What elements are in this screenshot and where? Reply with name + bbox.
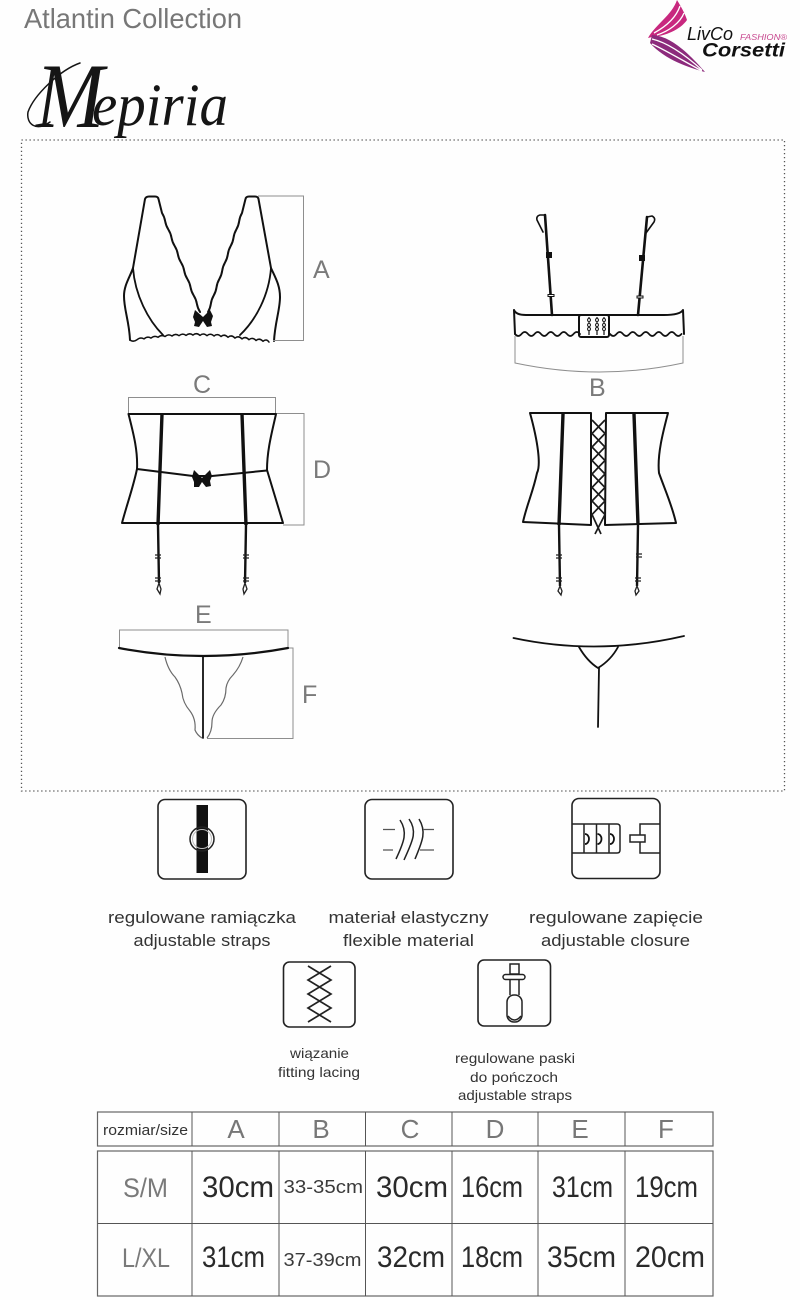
label C: C — [193, 371, 211, 399]
label: flexible material — [328, 908, 489, 950]
row L/XL — [122, 1241, 705, 1274]
garter lower straps — [158, 525, 246, 583]
product name — [28, 45, 228, 147]
diagram: corset back — [523, 413, 676, 595]
diagram: bra front — [124, 196, 330, 342]
bra outline — [124, 196, 280, 341]
garter clips — [556, 554, 642, 595]
waist band — [137, 469, 267, 476]
strap sliders — [546, 252, 645, 261]
label F: F — [302, 681, 317, 709]
label A: A — [313, 256, 330, 284]
label: adjustable stocking straps: adjustable straps — [458, 1087, 572, 1103]
waistband — [514, 636, 684, 647]
row L/XL: 35cm — [547, 1241, 616, 1274]
strap rings — [548, 294, 643, 298]
dotted frame — [22, 140, 784, 791]
label: fitting lacing — [278, 1045, 360, 1080]
row L/XL: 31cm — [202, 1241, 265, 1274]
diagram: bra back — [514, 215, 684, 402]
garter straps — [559, 414, 638, 525]
dimension E — [120, 630, 288, 648]
corset outline — [122, 414, 283, 523]
label: adjustable straps: adjustable straps — [134, 931, 270, 950]
script swash — [28, 63, 80, 127]
icon: adjustable closure — [572, 798, 660, 878]
column letters: C — [401, 1114, 419, 1144]
hook closure — [579, 315, 609, 337]
band scalloped edge — [515, 332, 682, 336]
bra lower scalloped edge — [130, 334, 269, 342]
label: adjustable stocking straps: do pończoch — [470, 1069, 558, 1085]
row S/M: 31cm — [552, 1171, 613, 1204]
size column title: rozmiar/size — [103, 1122, 188, 1139]
dimension A — [258, 196, 304, 340]
waistband — [119, 648, 288, 656]
dimension B — [515, 336, 683, 372]
column letters: A — [227, 1114, 245, 1144]
logo: LivCo Corsetti — [648, 0, 787, 72]
center seam — [202, 657, 204, 738]
bow — [193, 310, 213, 327]
column letters — [227, 1114, 674, 1144]
lace sides — [165, 657, 243, 738]
label: flexible material: materiał elastyczny — [328, 908, 489, 927]
straps — [545, 215, 647, 315]
dimension D — [276, 414, 304, 525]
garter lower straps — [559, 525, 638, 586]
hook eye dots — [588, 318, 606, 330]
dimension C — [128, 398, 276, 414]
column letters: E — [571, 1114, 589, 1144]
label: adjustable closure: adjustable closure — [541, 931, 690, 950]
diagram: thong back — [514, 636, 684, 727]
column letters: B — [312, 1114, 330, 1144]
icon: flexible material — [365, 800, 453, 879]
label: adjustable stocking straps — [455, 1050, 575, 1103]
label: adjustable straps: regulowane ramiączka — [108, 908, 297, 927]
triangle — [579, 647, 618, 668]
label D: D — [313, 456, 331, 484]
row S/M: 33-35cm — [284, 1177, 363, 1197]
table body — [98, 1151, 713, 1296]
row S/M: 16cm — [461, 1171, 523, 1204]
label: adjustable straps — [108, 908, 297, 950]
collection heading: Atlantin Collection — [24, 3, 242, 34]
label B: B — [589, 374, 606, 402]
garter clips — [155, 555, 249, 594]
logo text Corsetti: Corsetti — [702, 40, 786, 62]
hook eyes — [589, 317, 604, 335]
column letters: D — [486, 1114, 504, 1144]
icon: adjustable stocking straps — [478, 960, 550, 1026]
strap hooks — [537, 215, 655, 233]
table header — [98, 1112, 713, 1146]
lacing — [592, 420, 605, 534]
label: adjustable closure: regulowane zapięcie — [529, 908, 703, 927]
bra cups — [133, 268, 271, 335]
row S/M: 19cm — [635, 1171, 698, 1204]
row L/XL: 32cm — [377, 1241, 445, 1274]
row S/M: 30cm — [202, 1171, 274, 1204]
dimension F — [207, 648, 293, 738]
string — [598, 668, 599, 727]
column letters: F — [658, 1114, 674, 1144]
row L/XL: 18cm — [461, 1241, 523, 1274]
label: fitting lacing: wiązanie — [289, 1045, 349, 1061]
logo wing — [648, 0, 705, 72]
left panel — [523, 413, 591, 525]
row S/M: S/M — [123, 1173, 168, 1203]
label: flexible material: flexible material — [343, 931, 474, 950]
label E: E — [195, 601, 212, 629]
label: adjustable closure — [529, 908, 703, 950]
diagram: thong front — [119, 601, 317, 738]
row S/M: 30cm — [376, 1171, 448, 1204]
script lowercase letters: epiria — [92, 72, 228, 138]
icon: adjustable straps — [158, 800, 246, 879]
row L/XL: 37-39cm — [284, 1250, 362, 1270]
label: fitting lacing: fitting lacing — [278, 1064, 360, 1080]
right panel — [605, 413, 676, 525]
row L/XL: 20cm — [635, 1241, 705, 1274]
icon: fitting lacing — [284, 962, 355, 1027]
logo text LivCo: LivCo — [687, 24, 733, 44]
row S/M — [123, 1171, 698, 1204]
label: adjustable stocking straps: regulowane paski — [455, 1050, 575, 1066]
script capital M: M — [34, 45, 108, 147]
bow — [192, 470, 212, 487]
logo text fashion: FASHION® — [740, 33, 787, 42]
diagram: corset front — [122, 371, 331, 594]
garter straps — [158, 414, 246, 525]
row L/XL: L/XL — [122, 1243, 170, 1273]
band — [514, 310, 684, 334]
